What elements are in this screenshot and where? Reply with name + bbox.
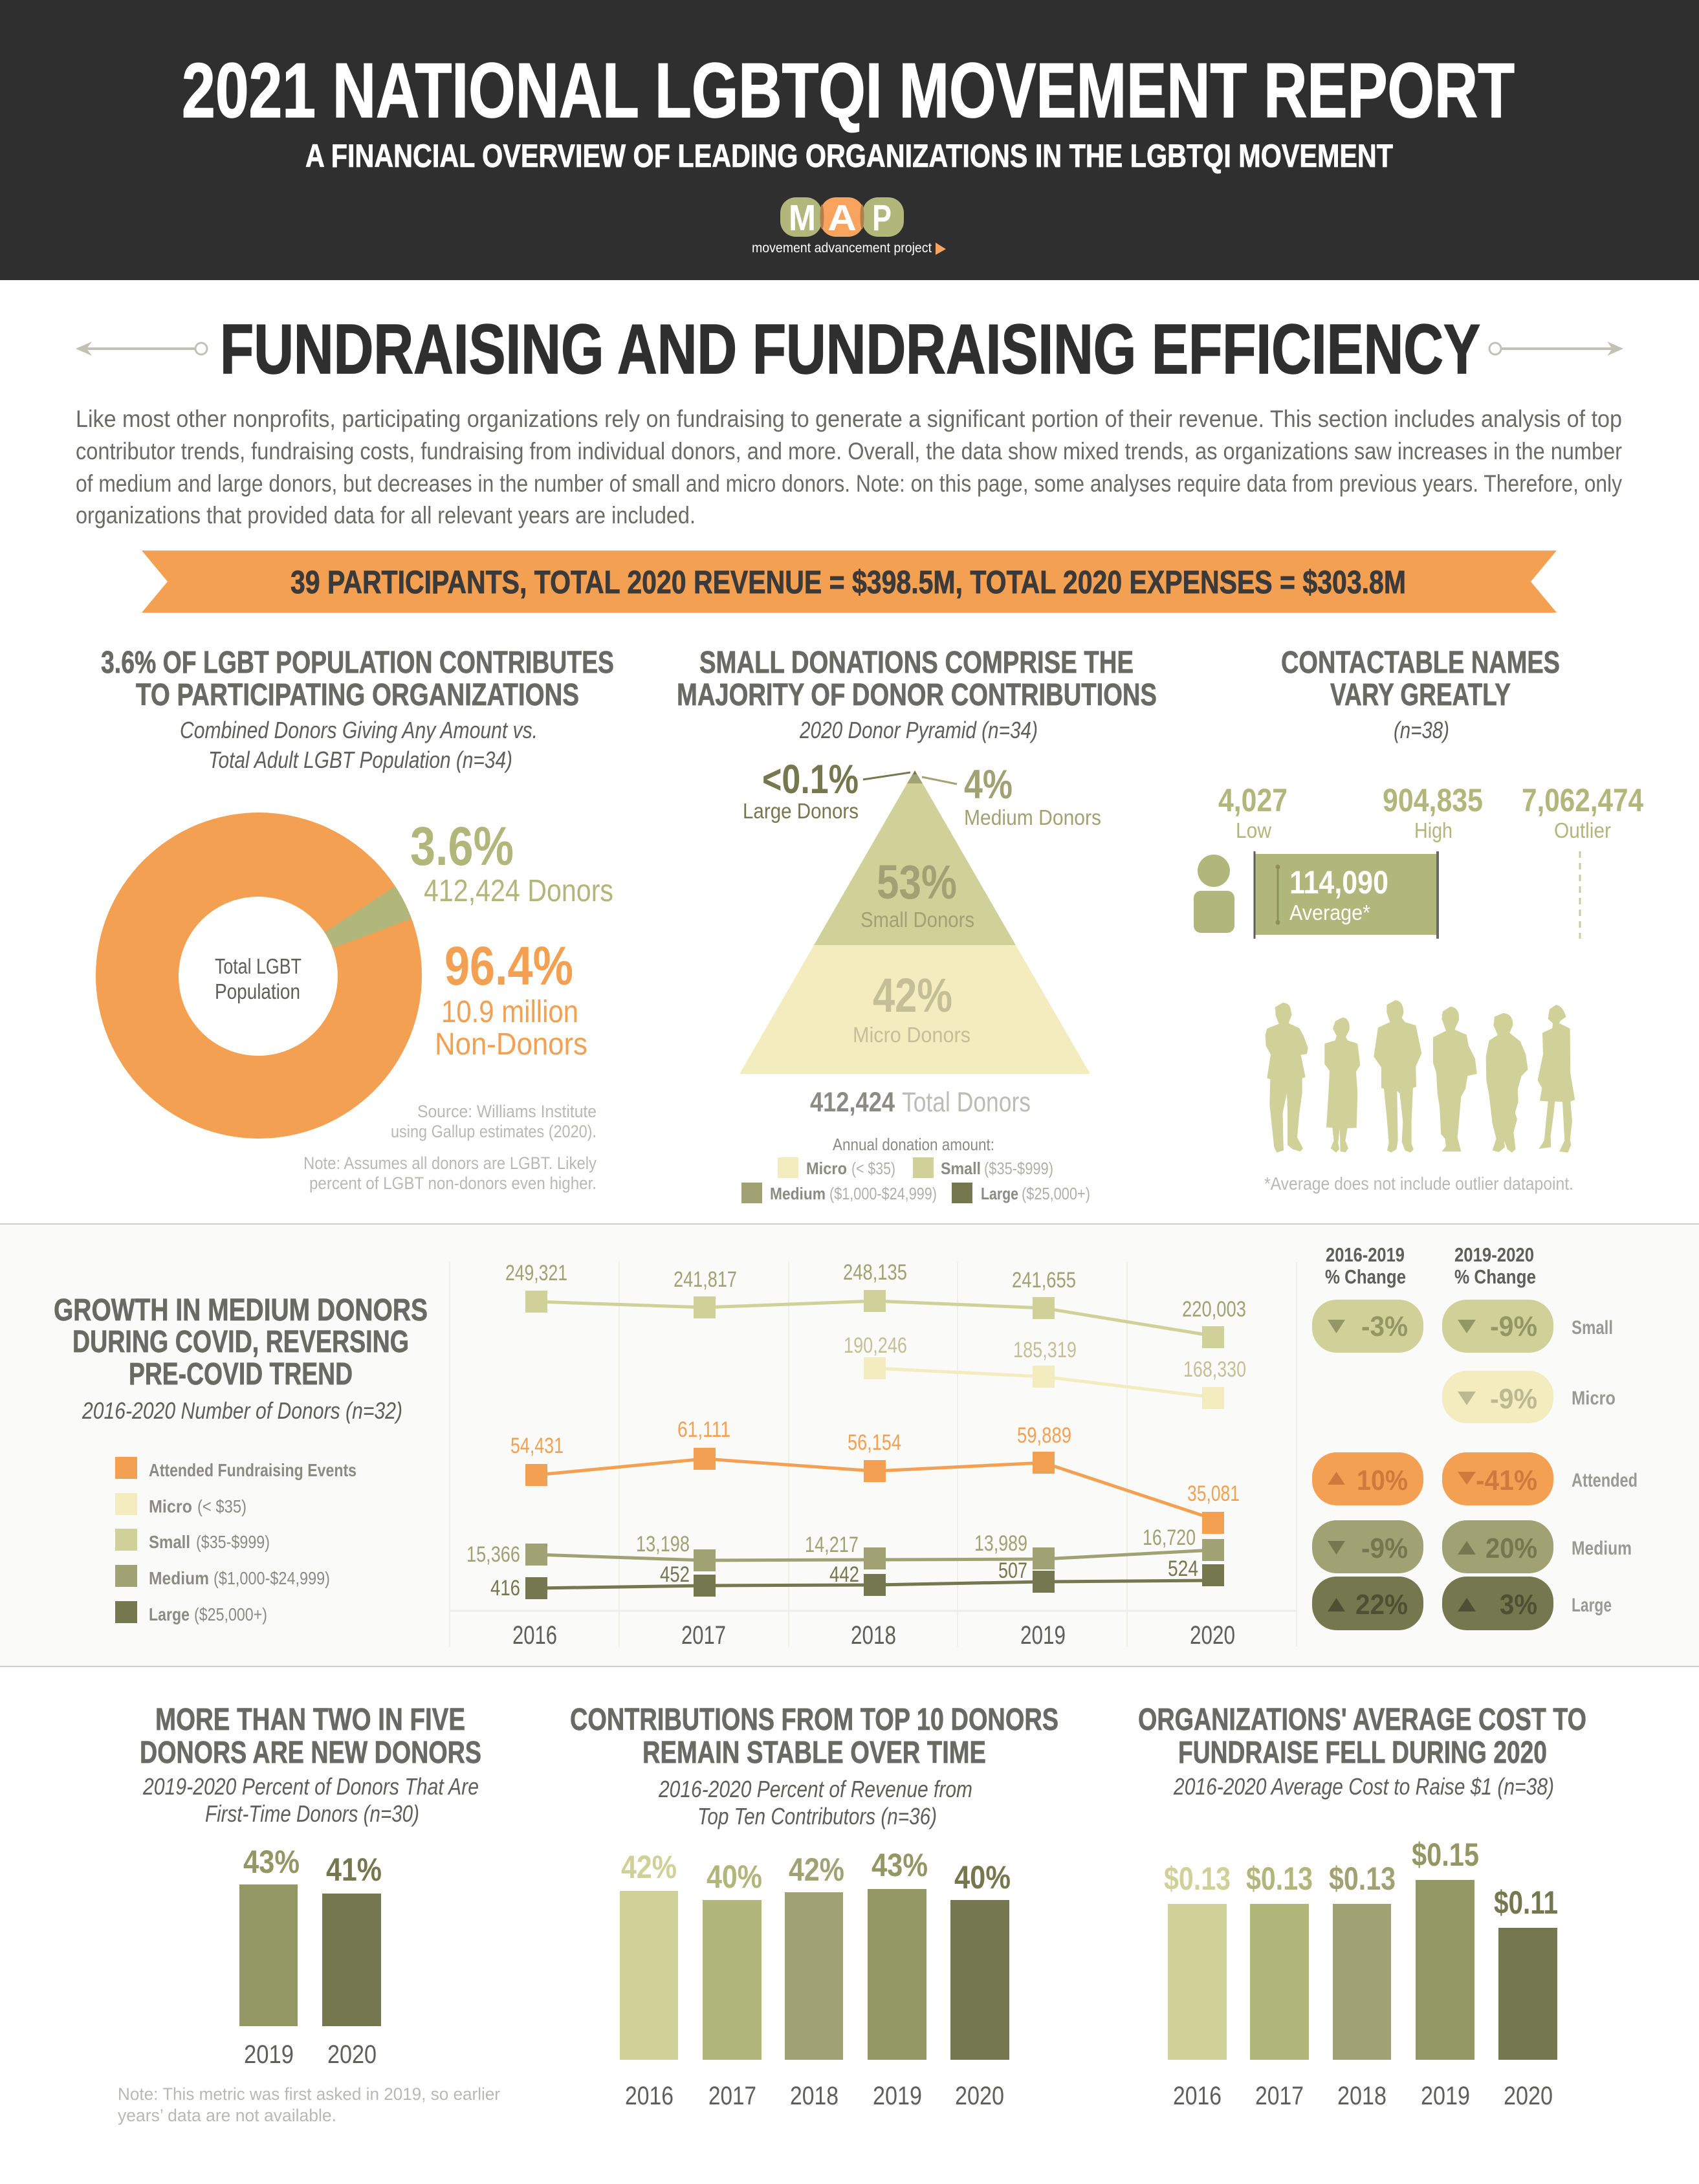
row: small: -3%	[1361, 1311, 1408, 1342]
series: attended labels: 35,081	[1187, 1481, 1240, 1506]
bar chart: 2020	[1504, 2082, 1553, 2110]
non-donor share callout: Non-Donors	[435, 1027, 587, 1062]
series: small labels: 220,003	[1182, 1297, 1246, 1322]
line chart legend: ($35-$999)	[196, 1532, 270, 1552]
series: medium labels: 16,720	[1143, 1525, 1196, 1550]
series: medium labels: 14,217	[805, 1533, 859, 1557]
source note: Source: Williams Institute	[417, 1102, 597, 1121]
line chart legend: Attended Fundraising Events	[149, 1460, 356, 1480]
subheading: 2016-2020 Percent of Revenue from	[658, 1776, 972, 1802]
series: small labels: 241,655	[1012, 1268, 1076, 1293]
icon: people silhouettes	[1266, 1000, 1575, 1153]
series: large labels: 416	[490, 1576, 520, 1600]
outlier value	[1522, 782, 1643, 842]
row: large	[1312, 1577, 1612, 1630]
total donors: 412,424	[810, 1087, 895, 1118]
bar chart: 2016	[625, 2082, 674, 2110]
non-donor share callout	[435, 935, 587, 1062]
line chart legend: Large	[149, 1604, 190, 1624]
low value	[1218, 782, 1288, 842]
series: large labels	[490, 1556, 1198, 1600]
row: micro: Micro	[1572, 1388, 1616, 1409]
medium donors label: Medium Donors	[964, 805, 1101, 829]
line chart legend: Micro	[149, 1496, 192, 1516]
x axis years: 2019	[1020, 1621, 1066, 1650]
bar chart: $0.13	[1164, 1861, 1231, 1897]
bar chart: $0.11	[1494, 1884, 1558, 1921]
total donors	[810, 1087, 1031, 1118]
row: medium: Medium	[1572, 1538, 1632, 1559]
heading: ORGANIZATIONS' AVERAGE COST TO	[1138, 1703, 1586, 1737]
column headers: 2019-2020	[1454, 1243, 1534, 1266]
heading: MAJORITY OF DONOR CONTRIBUTIONS	[677, 678, 1157, 712]
donut chart: Population	[215, 979, 300, 1003]
bar chart: 42%	[621, 1849, 677, 1885]
bar chart: 2016	[1173, 2082, 1222, 2110]
panel: growth in medium donors	[0, 1224, 1699, 1666]
series: large labels: 507	[998, 1558, 1027, 1583]
bar chart: 43%	[871, 1847, 928, 1883]
report subtitle: A FINANCIAL OVERVIEW OF LEADING ORGANIZATIONS IN THE LGBTQI MOVEMENT	[305, 138, 1393, 174]
series: medium	[525, 1539, 1224, 1571]
donor share callout: 3.6%	[410, 816, 514, 877]
donor share callout	[410, 816, 613, 908]
line chart legend: Small	[149, 1532, 190, 1552]
arrow: left ornament	[76, 342, 207, 356]
bar chart: 42%	[789, 1851, 844, 1888]
pyramid legend: ($35-$999)	[984, 1159, 1053, 1178]
pyramid legend	[741, 1135, 1090, 1203]
micro donors label: Micro Donors	[853, 1023, 970, 1047]
row: large: 3%	[1500, 1589, 1537, 1621]
MAP logo	[752, 197, 946, 256]
average range bar: Average*	[1289, 901, 1370, 924]
series: small labels: 241,817	[674, 1267, 737, 1292]
heading: DURING COVID, REVERSING	[72, 1325, 409, 1359]
note: years’ data are not available.	[118, 2106, 336, 2125]
subheading: 2019-2020 Percent of Donors That Are	[142, 1773, 479, 1800]
series: attended labels: 59,889	[1017, 1423, 1071, 1448]
pyramid legend: Small	[941, 1159, 981, 1178]
row: large: Large	[1572, 1595, 1612, 1616]
intro paragraph: organizations that provided data for all relevant years are included.	[76, 502, 696, 529]
subheading: Total Adult LGBT Population (n=34)	[208, 747, 512, 773]
donut chart	[96, 813, 422, 1139]
pyramid legend: Large	[981, 1184, 1018, 1203]
bar chart: $0.15	[1412, 1837, 1479, 1873]
subheading: Top Ten Contributors (n=36)	[697, 1803, 937, 1829]
subheading	[142, 1773, 479, 1827]
series: micro labels: 168,330	[1183, 1357, 1246, 1382]
series: large labels: 452	[660, 1562, 690, 1587]
line chart legend: Medium	[149, 1568, 209, 1588]
series: large	[525, 1564, 1224, 1599]
bar chart: 2019	[244, 2040, 294, 2069]
x axis years: 2018	[851, 1621, 896, 1650]
row: micro: -9%	[1490, 1383, 1537, 1415]
bar chart: 43%	[243, 1844, 300, 1880]
subheading: Combined Donors Giving Any Amount vs.	[180, 717, 538, 743]
donor share callout: 412,424 Donors	[424, 874, 613, 908]
x axis years: 2020	[1190, 1621, 1235, 1650]
subheading: (n=38)	[1394, 717, 1449, 743]
medium donors label: 4%	[964, 762, 1013, 807]
small donors label: Small Donors	[860, 908, 974, 932]
heading: 3.6% OF LGBT POPULATION CONTRIBUTES	[101, 646, 614, 680]
series: medium labels: 13,198	[636, 1532, 690, 1556]
subheading: 2016-2020 Average Cost to Raise $1 (n=38)	[1173, 1773, 1554, 1800]
heading	[677, 646, 1157, 712]
series: small	[525, 1290, 1224, 1348]
donut chart: Total LGBT	[215, 954, 301, 978]
series: medium labels	[466, 1525, 1196, 1567]
series: attended labels: 54,431	[510, 1434, 564, 1458]
bar chart: 40%	[707, 1859, 762, 1895]
source note: using Gallup estimates (2020).	[391, 1122, 597, 1141]
small donors label: 53%	[877, 855, 957, 909]
column headers: % Change	[1454, 1265, 1536, 1288]
subheading	[180, 717, 538, 773]
row: medium: -9%	[1361, 1533, 1408, 1564]
percent change table	[1312, 1243, 1638, 1630]
line chart legend	[115, 1457, 356, 1624]
medium donors label	[922, 762, 1101, 829]
line chart	[450, 1260, 1297, 1650]
series: micro	[864, 1357, 1224, 1409]
series: micro labels: 190,246	[844, 1333, 907, 1358]
bar chart: 2018	[790, 2082, 839, 2110]
bar chart	[1164, 1837, 1558, 2110]
series: attended fundraising events	[525, 1448, 1224, 1534]
outlier value: Outlier	[1554, 818, 1611, 842]
x axis years: 2016	[512, 1621, 557, 1650]
row: attended: 10%	[1357, 1465, 1408, 1496]
large donors label: <0.1%	[762, 757, 859, 802]
pyramid legend: ($25,000+)	[1022, 1184, 1090, 1203]
pyramid legend: Micro	[806, 1159, 847, 1178]
series: small labels: 249,321	[505, 1261, 567, 1285]
heading: MORE THAN TWO IN FIVE	[155, 1703, 465, 1737]
heading: DONORS ARE NEW DONORS	[140, 1736, 481, 1770]
source note: Note: Assumes all donors are LGBT. Likely	[303, 1153, 597, 1173]
arrow: right ornament	[1489, 342, 1623, 356]
note: Note: This metric was first asked in 2019, so earlier	[118, 2084, 500, 2104]
series: small labels: 248,135	[843, 1260, 907, 1285]
subheading: First-Time Donors (n=30)	[205, 1800, 419, 1827]
heading: PRE-COVID TREND	[129, 1357, 353, 1392]
row: small	[1312, 1300, 1613, 1353]
large donors label: Large Donors	[743, 799, 859, 823]
panel: cost to fundraise	[1138, 1703, 1586, 2110]
row: large: 22%	[1355, 1589, 1408, 1621]
heading: VARY GREATLY	[1330, 678, 1511, 712]
panel: donor pyramid	[677, 646, 1157, 1203]
total donors: Total Donors	[902, 1087, 1031, 1118]
note	[118, 2084, 500, 2125]
subheading: 2016-2020 Number of Donors (n=32)	[82, 1397, 402, 1424]
subheading	[658, 1776, 972, 1829]
bar chart: 2019	[873, 2082, 922, 2110]
low value: Low	[1236, 818, 1271, 842]
series: large labels: 524	[1168, 1556, 1198, 1581]
icon: person	[1194, 855, 1234, 933]
MAP logo: M	[789, 197, 816, 239]
bar chart: 41%	[326, 1851, 382, 1888]
bar chart	[239, 1844, 382, 2069]
series: medium labels: 13,989	[974, 1531, 1027, 1556]
heading: FUNDRAISE FELL DURING 2020	[1178, 1736, 1547, 1770]
heading	[101, 646, 614, 712]
source note	[303, 1102, 597, 1193]
average range bar	[1255, 851, 1438, 939]
line chart legend: (< $35)	[197, 1496, 247, 1516]
micro donors label	[853, 968, 970, 1047]
bar chart: 2017	[1255, 2082, 1304, 2110]
MAP logo: A	[828, 197, 857, 239]
bar chart: $0.13	[1246, 1861, 1313, 1897]
heading: CONTACTABLE NAMES	[1281, 646, 1560, 680]
row: medium	[1312, 1520, 1632, 1573]
panel: contactable names	[1194, 646, 1643, 1194]
heading: CONTRIBUTIONS FROM TOP 10 DONORS	[570, 1703, 1058, 1737]
row: micro	[1442, 1371, 1616, 1423]
series: micro labels: 185,319	[1013, 1338, 1077, 1362]
heading	[1138, 1703, 1586, 1770]
heading: SMALL DONATIONS COMPRISE THE	[699, 646, 1134, 680]
high value: High	[1414, 818, 1452, 842]
micro donors label: 42%	[873, 968, 952, 1022]
heading	[54, 1293, 428, 1392]
bar chart: $0.13	[1329, 1861, 1396, 1897]
MAP logo: movement advancement project	[752, 241, 932, 256]
bar chart: 40%	[954, 1859, 1011, 1895]
subheading: 2020 Donor Pyramid (n=34)	[799, 717, 1038, 743]
panel: top 10 donors	[570, 1703, 1058, 2110]
series: large labels: 442	[829, 1562, 859, 1587]
heading	[570, 1703, 1058, 1770]
pyramid legend: Annual donation amount:	[833, 1135, 994, 1154]
heading	[1281, 646, 1560, 712]
x axis years: 2017	[681, 1621, 726, 1650]
line chart legend: ($1,000-$24,999)	[214, 1568, 330, 1588]
row: attended: Attended	[1572, 1470, 1638, 1491]
row: attended	[1312, 1452, 1638, 1505]
column headers: % Change	[1325, 1265, 1406, 1288]
header banner	[0, 0, 1699, 280]
non-donor share callout: 96.4%	[444, 935, 573, 996]
row: attended: -41%	[1476, 1465, 1537, 1496]
panel: new donors	[118, 1703, 500, 2125]
bar chart: 2019	[1421, 2082, 1470, 2110]
intro paragraph	[76, 406, 1622, 529]
line chart legend: ($25,000+)	[194, 1604, 267, 1624]
row: small: Small	[1572, 1317, 1613, 1338]
series: small labels	[505, 1260, 1246, 1322]
series: micro labels	[844, 1333, 1246, 1382]
heading	[140, 1703, 481, 1770]
average range bar: 114,090	[1289, 864, 1388, 901]
large donors label	[743, 757, 910, 823]
high value	[1383, 782, 1483, 842]
non-donor share callout: 10.9 million	[441, 995, 578, 1029]
series: attended labels: 61,111	[677, 1417, 730, 1442]
ribbon banner	[142, 551, 1557, 613]
pyramid legend: ($1,000-$24,999)	[829, 1184, 937, 1203]
series: attended labels: 56,154	[848, 1430, 901, 1455]
series: attended labels	[510, 1417, 1240, 1506]
pyramid legend: Medium	[770, 1184, 826, 1203]
high value: 904,835	[1383, 782, 1483, 818]
outlier value: 7,062,474	[1522, 782, 1643, 818]
row: small: -9%	[1490, 1311, 1537, 1342]
bar chart	[620, 1847, 1011, 2110]
bar chart: 2020	[327, 2040, 377, 2069]
panel: LGBT population donut	[96, 646, 614, 1193]
heading: GROWTH IN MEDIUM DONORS	[54, 1293, 428, 1327]
pyramid legend: (< $35)	[851, 1159, 895, 1178]
heading: TO PARTICIPATING ORGANIZATIONS	[136, 678, 579, 712]
row: medium: 20%	[1485, 1533, 1537, 1564]
x axis years	[512, 1621, 1235, 1650]
pyramid chart	[740, 770, 1090, 1074]
column headers	[1325, 1243, 1536, 1288]
bar chart: 2018	[1337, 2082, 1387, 2110]
source note: percent of LGBT non-donors even higher.	[309, 1174, 597, 1193]
small donors label	[860, 855, 974, 932]
MAP logo: P	[872, 197, 892, 239]
ribbon banner: 39 PARTICIPANTS, TOTAL 2020 REVENUE = $398.5M, TOTAL 2020 EXPENSES = $303.8M	[290, 564, 1406, 600]
series: medium labels: 15,366	[466, 1542, 520, 1567]
low value: 4,027	[1218, 782, 1288, 818]
heading: REMAIN STABLE OVER TIME	[642, 1736, 986, 1770]
bar chart: 2017	[708, 2082, 756, 2110]
footnote: *Average does not include outlier datapoint.	[1264, 1174, 1573, 1194]
column headers: 2016-2019	[1326, 1243, 1405, 1266]
outlier dashed marker	[1579, 851, 1581, 939]
bar chart: 2020	[955, 2082, 1004, 2110]
